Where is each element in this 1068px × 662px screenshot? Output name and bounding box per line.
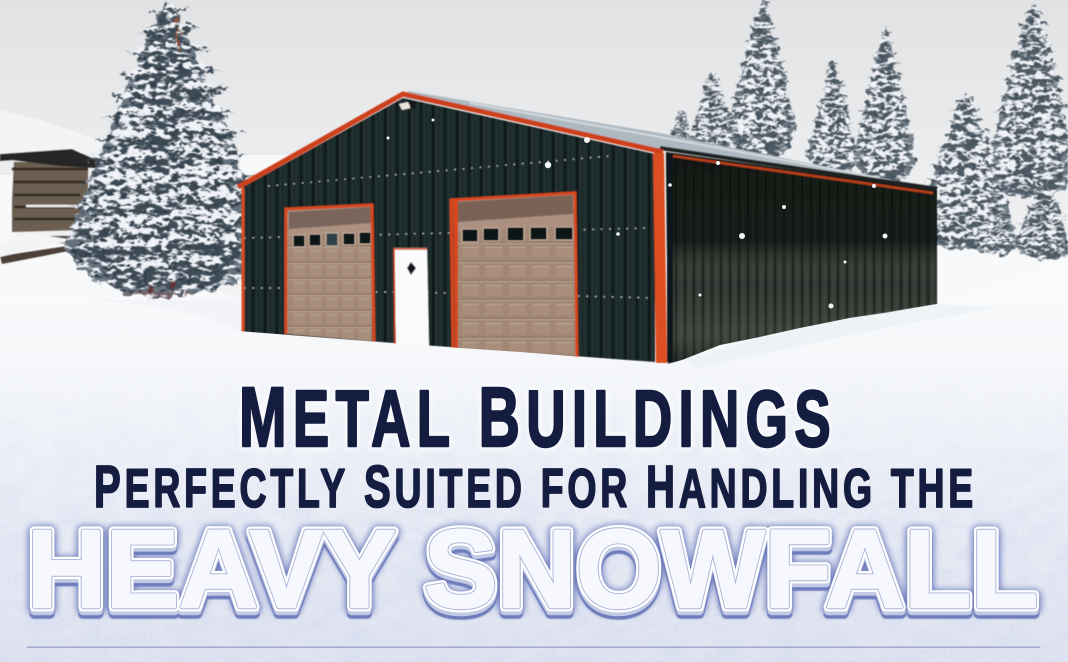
- title line 1: [239, 371, 831, 465]
- frame: [451, 193, 577, 357]
- inner line: HEAVY SNOWFALL: [27, 508, 1038, 631]
- distant snowy ground: [0, 155, 1068, 420]
- halo: HEAVY SNOWFALL: [27, 509, 1038, 632]
- side wall: [666, 152, 937, 364]
- gutter: [660, 148, 937, 189]
- white door: [394, 248, 429, 347]
- foreground snow: [0, 262, 1068, 662]
- line 1 text: METAL BUILDINGS: [239, 371, 831, 465]
- cabin roof eave: [0, 149, 100, 168]
- falling snowflakes: [386, 118, 888, 308]
- side eave trim: [673, 156, 933, 193]
- roof: [405, 91, 937, 189]
- cabin low logs: [0, 236, 74, 264]
- tree right 3: [807, 60, 859, 174]
- garage door left: [285, 204, 374, 341]
- snow mottling: [182, 503, 1012, 579]
- windows: [462, 229, 478, 242]
- log cabin: [0, 110, 104, 264]
- tree right 7: [1013, 182, 1068, 258]
- tree far left small: [671, 110, 691, 142]
- metal building: [238, 91, 937, 364]
- frame: [286, 205, 374, 341]
- cabin log wall: [12, 162, 88, 232]
- title: [27, 371, 1038, 638]
- trees: background right forest: [671, 0, 1068, 258]
- title line 3: heavy snowfall: [27, 508, 1038, 638]
- letter fill: HEAVY SNOWFALL: [27, 508, 1038, 631]
- orange rake trim: [238, 94, 663, 187]
- sky background: [0, 0, 1068, 300]
- line 1 glow: METAL BUILDINGS: [239, 371, 831, 465]
- extruded shadow dark: HEAVY SNOWFALL: [27, 515, 1038, 638]
- orange left trim: [242, 188, 244, 332]
- garage door right: [451, 193, 577, 357]
- screw lines: [244, 156, 654, 298]
- tree right 4: [854, 26, 916, 184]
- tree right 5: [915, 94, 1015, 249]
- tree skirt: [110, 260, 210, 298]
- windows: [293, 235, 305, 247]
- corner post: [653, 153, 667, 363]
- trunk: [175, 18, 179, 52]
- tree right 2: [727, 0, 797, 158]
- tree right 6: [986, 4, 1068, 197]
- door diamond window: [407, 262, 416, 275]
- cabin snow roof: [0, 110, 104, 156]
- side post dark: [667, 156, 673, 362]
- snow drift along side wall: [685, 304, 1000, 368]
- tree right 8: [973, 196, 1017, 254]
- extruded shadow light: HEAVY SNOWFALL: [27, 512, 1038, 635]
- snow texture: [0, 340, 1068, 662]
- front gable wall: [243, 98, 655, 362]
- title line 2: PERFECTLY SUITED FOR HANDLING THE: [94, 453, 973, 520]
- wall light: [399, 102, 411, 110]
- divider line: [27, 646, 1040, 648]
- white outline: HEAVY SNOWFALL: [27, 508, 1038, 631]
- tree right 1: [690, 72, 736, 151]
- big spruce tree: [64, 0, 272, 299]
